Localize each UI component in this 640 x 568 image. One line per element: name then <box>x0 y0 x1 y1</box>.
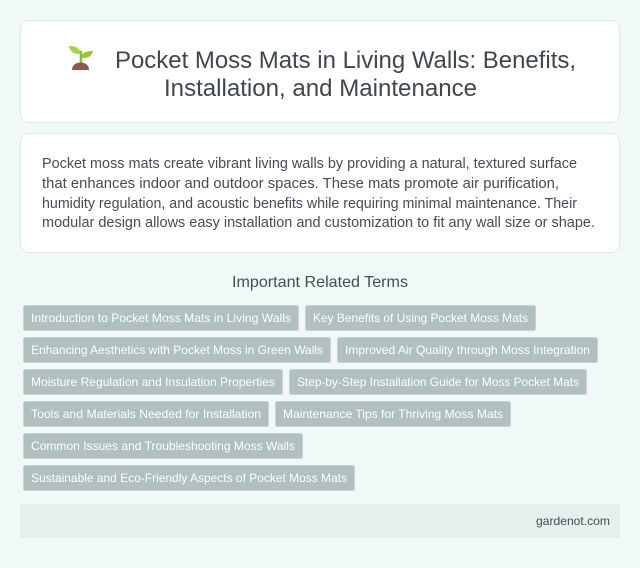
term chips <box>24 306 598 490</box>
chip: maintenance: Maintenance Tips for Thriving Moss Mats <box>283 407 503 421</box>
footer bar <box>20 504 620 538</box>
intro paragraph: that enhances indoor and outdoor spaces. These mats promote air purification, <box>42 176 559 192</box>
panel: title card <box>20 20 620 122</box>
icon: seedling <box>69 46 93 70</box>
heading: related terms: Important Related Terms <box>232 274 408 291</box>
panel: introduction <box>20 134 620 252</box>
title: Pocket Moss Mats in Living Walls: Benefits, <box>115 47 576 74</box>
chip: introduction: Introduction to Pocket Moss Mats in Living Walls <box>31 311 291 325</box>
chip: moisture <box>24 370 282 394</box>
footer source: gardenot.com <box>536 514 610 528</box>
title: Installation, and Maintenance <box>164 75 477 102</box>
intro paragraph: humidity regulation, and acoustic benefits while requiring minimal maintenance. Their <box>42 196 577 212</box>
chip: sustainability: Sustainable and Eco-Friendly Aspects of Pocket Moss Mats <box>31 471 347 485</box>
chip: air quality <box>338 338 598 362</box>
chip: aesthetics <box>24 338 330 362</box>
chip: sustainability <box>24 466 354 490</box>
chip: introduction <box>24 306 298 330</box>
chip: installation guide <box>290 370 586 394</box>
chip: aesthetics: Enhancing Aesthetics with Pocket Moss in Green Walls <box>31 343 323 357</box>
chip: air quality: Improved Air Quality through Moss Integration <box>345 343 590 357</box>
intro paragraph: Pocket moss mats create vibrant living walls by providing a natural, textured surface <box>42 156 577 172</box>
chip: installation guide: Step-by-Step Installation Guide for Moss Pocket Mats <box>297 375 579 389</box>
chip: key benefits <box>306 306 536 330</box>
chip: tools <box>24 402 268 426</box>
chip: troubleshooting: Common Issues and Troubleshooting Moss Walls <box>31 439 295 453</box>
chip: key benefits: Key Benefits of Using Pocket Moss Mats <box>313 311 528 325</box>
chip: maintenance <box>276 402 510 426</box>
chip: moisture: Moisture Regulation and Insulation Properties <box>31 375 275 389</box>
chip: tools: Tools and Materials Needed for Installation <box>31 407 261 421</box>
chip: troubleshooting <box>24 434 302 458</box>
intro paragraph: modular design allows easy installation and customization to fit any wall size or shape. <box>42 215 595 231</box>
